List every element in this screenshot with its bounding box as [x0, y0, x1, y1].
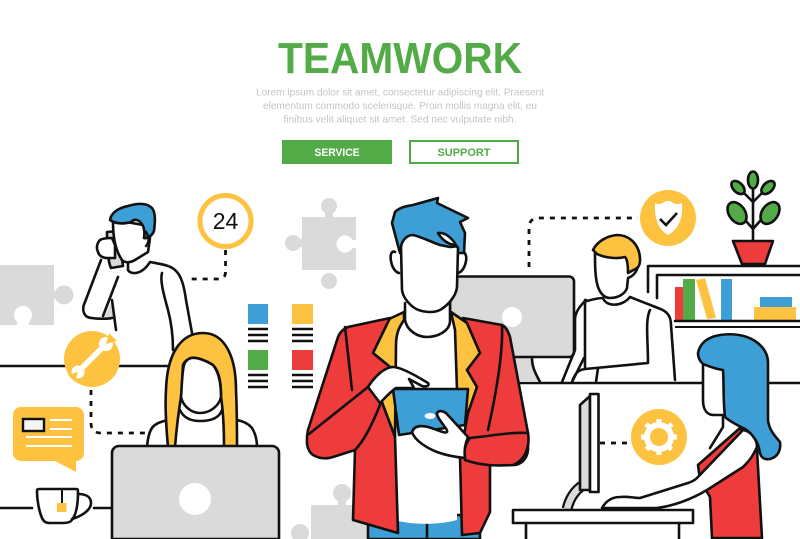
face	[401, 235, 458, 312]
neck	[405, 300, 450, 337]
intro paragraph: Lorem ipsum dolor sit amet, consectetur adipiscing elit. Praesent	[256, 88, 544, 98]
button: support	[410, 141, 518, 163]
person: woman with blue hair	[602, 334, 780, 538]
icon: shield badge	[640, 190, 696, 246]
button: service	[282, 140, 392, 164]
t-shirt	[395, 320, 457, 524]
colour swatches legend	[248, 304, 313, 387]
dashed connector: shield	[529, 218, 638, 267]
puzzle piece: top centre	[285, 198, 357, 289]
right lapel	[451, 312, 480, 413]
intro paragraph: finibus velit aliquet sit amet. Sed nec vulputate nibh.	[284, 114, 516, 126]
puzzle piece: left	[0, 265, 74, 326]
arm	[602, 430, 757, 508]
bookshelf	[648, 266, 800, 327]
dashed connector: wrench	[91, 390, 148, 433]
person: man on the phone	[83, 204, 192, 350]
monitor: back view	[450, 276, 574, 382]
tablet	[393, 389, 468, 435]
neck and chest	[710, 413, 723, 448]
dashed connector: gear	[600, 442, 628, 444]
icon: gear badge	[631, 409, 687, 465]
ears	[391, 252, 399, 273]
desk lines	[0, 366, 800, 508]
button: service: SERVICE	[314, 147, 360, 159]
side monitor on desk	[567, 394, 598, 509]
hair	[698, 334, 780, 459]
badge: 24 hours	[200, 196, 251, 246]
title: TEAMWORK	[278, 34, 522, 83]
icon: speech bubble	[13, 407, 84, 472]
jacket right	[460, 318, 528, 535]
puzzle piece: bottom centre	[291, 484, 371, 539]
person: woman with long yellow hair	[147, 333, 257, 447]
person: central man with tablet	[307, 198, 528, 539]
intro paragraph	[256, 88, 544, 126]
laptop	[112, 446, 279, 539]
intro paragraph: elementum commodo scelerisque. Proin mollis magna elit, eu	[263, 101, 537, 112]
jacket folds	[309, 325, 502, 450]
left lapel	[373, 312, 404, 437]
dress	[698, 428, 762, 538]
sleeve cuff	[464, 433, 528, 465]
plant	[724, 172, 783, 264]
button: support: SUPPORT	[438, 147, 491, 159]
face	[703, 360, 728, 415]
badge: 24 hours: 24	[213, 208, 238, 234]
dashed connector: 24 badge	[189, 250, 226, 279]
lower hand	[412, 411, 468, 458]
icon: tea cup	[37, 489, 91, 523]
jacket left	[307, 318, 398, 533]
hair highlight	[438, 233, 456, 245]
desk	[513, 510, 693, 539]
pointing hand	[368, 367, 429, 403]
jeans	[368, 515, 480, 539]
hair	[392, 198, 468, 253]
icon: wrench badge	[64, 331, 120, 387]
person: man at monitor	[562, 235, 675, 382]
